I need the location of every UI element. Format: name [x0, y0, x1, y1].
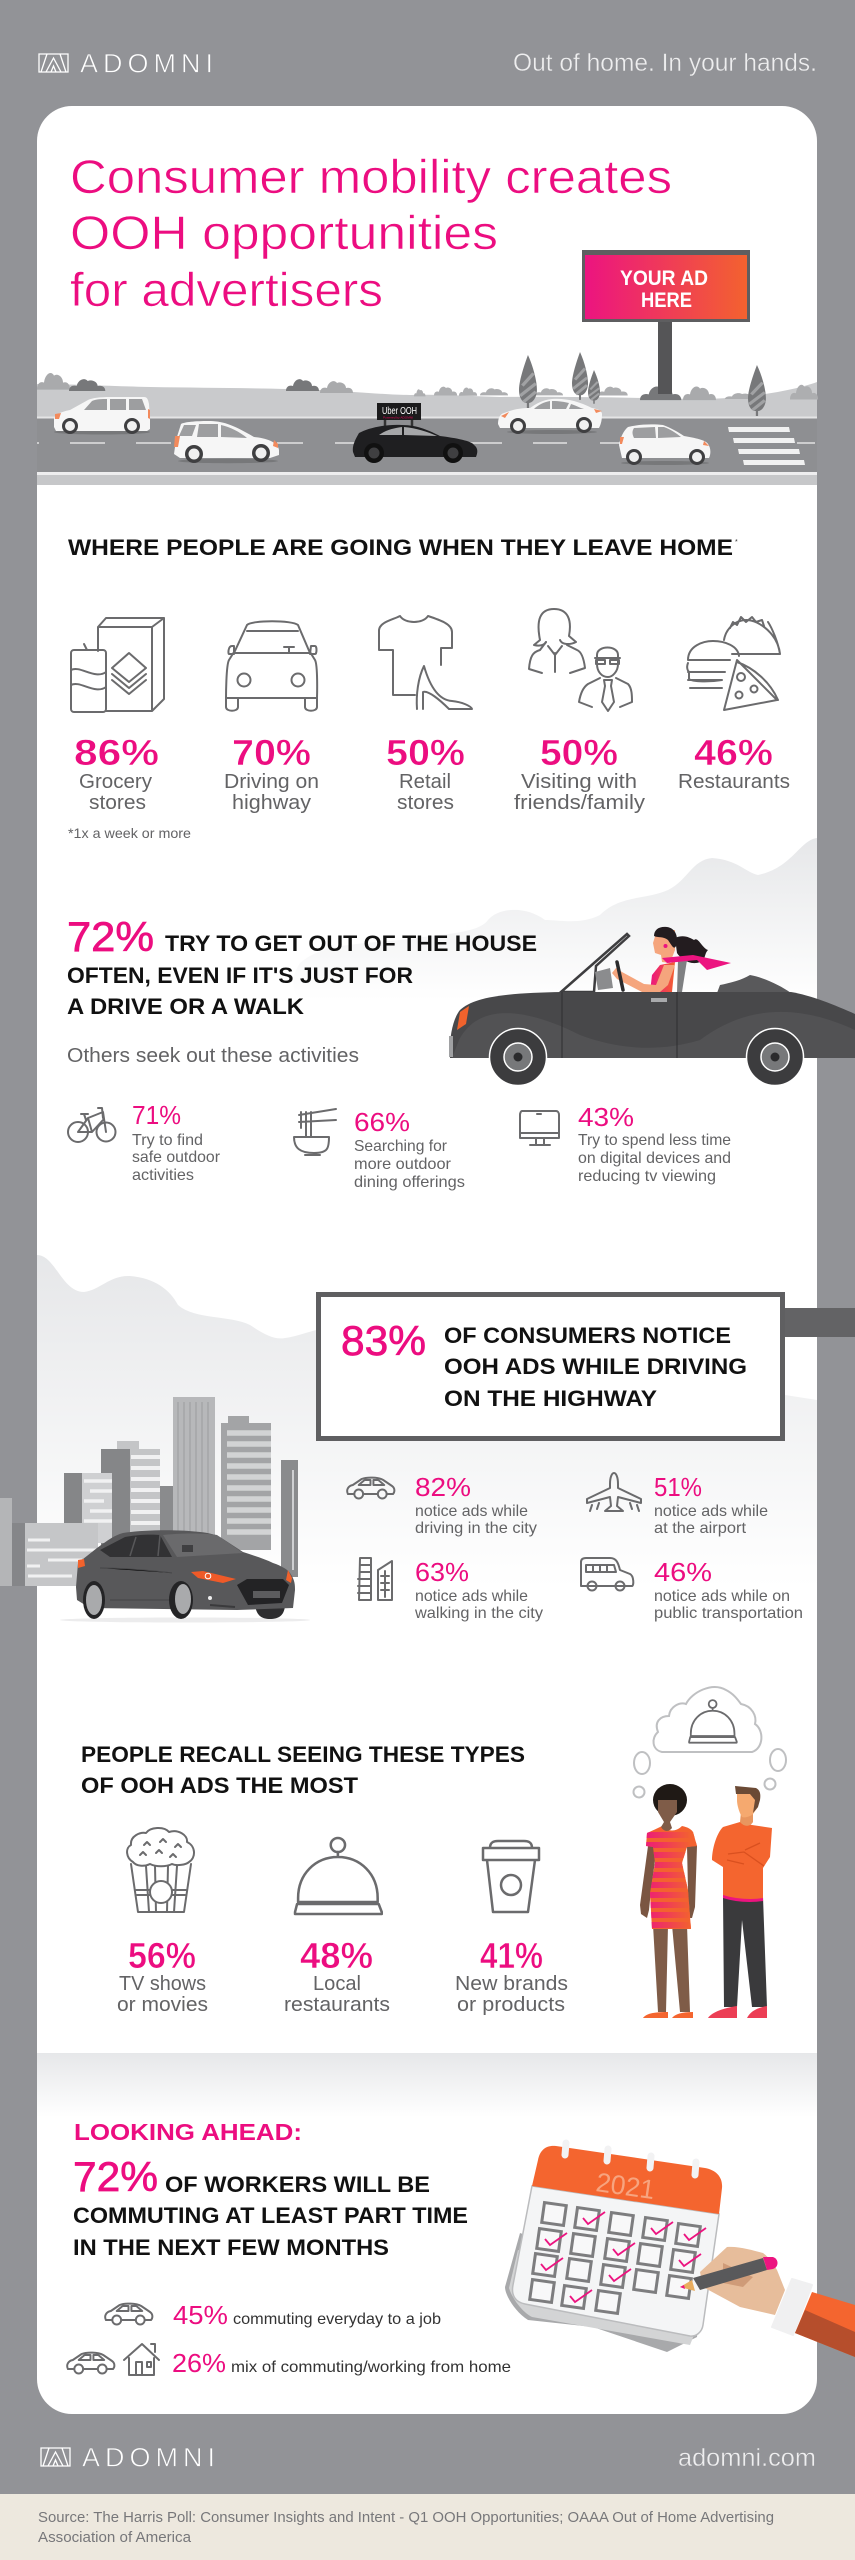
- illustration: calendar and hand: 2021: [594, 2167, 657, 2205]
- pencil: [680, 2257, 778, 2291]
- wheels: [83, 1581, 105, 1619]
- front low tower: [64, 1473, 112, 1543]
- heading: 72 percent get out: 72%: [67, 913, 154, 960]
- billboard callout: 83 percent: [318, 1294, 855, 1438]
- icon: shirt and heel: [379, 616, 472, 709]
- stat: airport: at the airport: [654, 1520, 747, 1537]
- section heading: recall: [81, 1742, 525, 1798]
- heading: 72 percent get out: TRY TO GET OUT OF THE HOUSE: [165, 931, 537, 956]
- heading: 72 percent of workers: OF WORKERS WILL BE: [165, 2172, 430, 2197]
- icon: burger taco pizza: [687, 617, 780, 710]
- car body: [450, 992, 855, 1058]
- icon: coffee cup: [483, 1841, 539, 1912]
- stat: TV shows or movies: [117, 1935, 208, 2016]
- check marks: [541, 2212, 706, 2302]
- footer logo: ADOMNI: [82, 2442, 215, 2472]
- illustration: grey sedan: [60, 1530, 310, 1622]
- looking ahead panel: [37, 2053, 817, 2117]
- crosswalk: [728, 427, 805, 465]
- folded roof: [717, 975, 791, 993]
- stat: TV shows or movies: 56%: [128, 1935, 196, 1976]
- activity: dining: 66%: [354, 1107, 410, 1137]
- stat: new brands or products: or products: [457, 1994, 565, 2016]
- activity: outdoor: [68, 1100, 221, 1184]
- activity: outdoor: activities: [132, 1167, 194, 1184]
- icon: bicycle: [68, 1108, 116, 1142]
- black car with Uber OOH topper: Powered by ADOMNI: [383, 416, 413, 420]
- stat: public transportation: 46%: [654, 1557, 712, 1587]
- grille: [237, 1579, 289, 1605]
- stat: driving in city: [347, 1472, 537, 1537]
- white sedan: [498, 399, 602, 434]
- head: [653, 1784, 687, 1816]
- dress: [646, 1826, 697, 1929]
- stat: driving in city: notice ads while: [415, 1503, 528, 1520]
- heading: 72 percent of workers: 72%: [73, 2153, 158, 2200]
- hair: [654, 927, 677, 948]
- icon: airplane: [587, 1473, 641, 1511]
- mid tower: [101, 1441, 160, 1545]
- activity: less screen time: on digital devices and: [578, 1150, 731, 1167]
- arm: [612, 965, 675, 992]
- binder rings: [565, 2143, 696, 2175]
- icon: popcorn: [127, 1828, 194, 1912]
- bushes and shrubs: [37, 373, 818, 400]
- stat: grocery stores: [74, 732, 159, 814]
- heading: 72 percent get out: [67, 913, 537, 1019]
- back pages: [505, 2233, 700, 2352]
- stat: grocery stores: stores: [89, 792, 146, 814]
- lane markings: [37, 442, 815, 444]
- stat: walking in city: [358, 1557, 543, 1622]
- stat: airport: notice ads while: [654, 1503, 768, 1520]
- seat: [677, 960, 687, 992]
- white hatchback: [174, 421, 279, 463]
- tall striped tower: [173, 1397, 215, 1542]
- low building: [25, 1523, 98, 1586]
- illustration: woman driving convertible: [449, 927, 855, 1086]
- stat: local restaurants: [284, 1935, 390, 2016]
- icon: car: [347, 1478, 394, 1498]
- activity: less screen time: Try to spend less time: [578, 1132, 731, 1149]
- icon: car: [105, 2304, 152, 2324]
- billboard: YOUR AD: [620, 267, 708, 290]
- headlight: [191, 1571, 236, 1583]
- thought cloud with cloche: [634, 1687, 786, 1798]
- building out of panel: [0, 1498, 12, 1586]
- billboard callout: 83 percent: 83%: [341, 1317, 426, 1364]
- shoes: [708, 2006, 767, 2018]
- stat: walking in city: 63%: [415, 1557, 469, 1587]
- heading: 72 percent of workers: [73, 2153, 468, 2260]
- body: [76, 1530, 295, 1610]
- billboard: HERE: [641, 289, 692, 312]
- heading: 72 percent of workers: COMMUTING AT LEAST PART TIME: [73, 2203, 468, 2228]
- footer website: adomni.com: [678, 2444, 816, 2472]
- stat: walking in city: walking in the city: [414, 1605, 543, 1622]
- icon: car and house: [67, 2344, 159, 2375]
- title: for advertisers: [70, 263, 383, 316]
- activity: dining: Searching for: [354, 1138, 448, 1155]
- subheading: Others seek out these activities: [67, 1045, 359, 1067]
- wheels: [490, 1028, 804, 1086]
- source band: Source: The Harris Poll: Consumer Insights and Intent - Q1 OOH Opportunities; OAAA Out of Home Advertising: [38, 2509, 774, 2526]
- stat: mixed commuting: mix of commuting/working from home: [231, 2359, 511, 2376]
- stat: mixed commuting: 26%: [172, 2348, 226, 2378]
- stat: airport: [587, 1472, 768, 1537]
- icon: buildings: [358, 1558, 392, 1600]
- side windows: [100, 1535, 172, 1557]
- stat: TV shows or movies: TV shows: [119, 1973, 206, 1995]
- stat: visiting friends and family: 50%: [540, 732, 618, 773]
- torso: [650, 962, 675, 992]
- white van: [54, 397, 150, 434]
- stat: commuting everyday: [105, 2300, 441, 2330]
- section heading: where people go: WHERE PEOPLE ARE GOING WHEN THEY LEAVE HOME: [68, 535, 733, 560]
- stat: retail stores: Retail: [399, 771, 451, 793]
- section heading: recall: OF OOH ADS THE MOST: [81, 1773, 358, 1798]
- stat: visiting friends and family: friends/family: [514, 792, 645, 814]
- stat: retail stores: [386, 732, 465, 814]
- heading: 72 percent get out: A DRIVE OR A WALK: [67, 994, 305, 1019]
- scarf: [662, 955, 731, 970]
- activity: outdoor: 71%: [132, 1100, 181, 1130]
- background cloud behind convertible: [293, 838, 817, 1000]
- stat: driving on highway: highway: [232, 792, 311, 814]
- face and neck: [653, 930, 675, 963]
- stat: new brands or products: New brands: [455, 1973, 568, 1995]
- black car with Uber OOH topper: [353, 403, 477, 463]
- right tower: [221, 1416, 271, 1550]
- stat: walking in city: notice ads while: [415, 1588, 528, 1605]
- hero road scene: [37, 250, 818, 485]
- trees: [519, 352, 766, 416]
- heading: 72 percent get out: OFTEN, EVEN IF IT'S JUST FOR: [67, 963, 413, 988]
- icon: two people: [529, 609, 632, 711]
- hand: [700, 2247, 785, 2315]
- billboard callout: 83 percent: OOH ADS WHILE DRIVING: [444, 1354, 747, 1379]
- activity: dining: more outdoor: [354, 1156, 452, 1173]
- stat: TV shows or movies: or movies: [117, 1994, 208, 2016]
- windscreen: [163, 1534, 243, 1557]
- stat: visiting friends and family: Visiting with: [521, 771, 637, 793]
- sleeve: [795, 2292, 855, 2357]
- title: [70, 150, 672, 316]
- illustration: calendar and hand: [505, 2143, 855, 2357]
- stat: driving on highway: [224, 732, 319, 814]
- icon: restaurant cloche: [295, 1838, 382, 1914]
- stat: driving on highway: Driving on: [224, 771, 319, 793]
- icon: bus: [581, 1558, 633, 1590]
- activity: less screen time: 43%: [578, 1102, 634, 1132]
- illustration: city skyline: [0, 1397, 298, 1586]
- steering wheel: [617, 962, 623, 990]
- header tagline: Out of home. In your hands.: [513, 49, 817, 77]
- windshield frame: [561, 934, 629, 992]
- road: [37, 418, 817, 472]
- trousers: [723, 1897, 767, 2007]
- stat: new brands or products: 41%: [480, 1935, 543, 1976]
- stat: mixed commuting: [67, 2344, 511, 2378]
- heading: looking ahead: LOOKING AHEAD:: [74, 2119, 302, 2145]
- stat: restaurants: [678, 732, 790, 793]
- face: [737, 1792, 758, 1817]
- section heading: where people go: *: [735, 539, 738, 546]
- footnote: *1x a week or more: [68, 825, 191, 841]
- stat: grocery stores: 86%: [74, 732, 159, 773]
- arms: [640, 1846, 697, 1918]
- hills: [37, 382, 817, 420]
- white compact: [619, 424, 710, 465]
- activity: less screen time: reducing tv viewing: [578, 1168, 716, 1185]
- title: OOH opportunities: [70, 206, 498, 259]
- icon: grocery: [71, 618, 164, 712]
- stat: driving in city: 82%: [415, 1472, 471, 1502]
- activity: less screen time: [520, 1102, 731, 1185]
- stat: driving on highway: 70%: [232, 732, 311, 773]
- illustration: woman: [640, 1784, 700, 2018]
- stat: grocery stores: Grocery: [79, 771, 152, 793]
- activity: dining: dining offerings: [354, 1174, 465, 1191]
- icon: monitor: [520, 1111, 559, 1145]
- background cloud behind city: [37, 1255, 817, 1587]
- stat: public transportation: notice ads while on: [654, 1588, 790, 1605]
- stat: retail stores: 50%: [386, 732, 465, 773]
- calendar page: [512, 2186, 719, 2336]
- source band: Association of America: [38, 2529, 192, 2546]
- billboard callout: 83 percent: OF CONSUMERS NOTICE: [444, 1323, 731, 1348]
- stat: commuting everyday: 45%: [173, 2300, 228, 2330]
- stat: local restaurants: restaurants: [284, 1994, 390, 2016]
- billboard callout: 83 percent: ON THE HIGHWAY: [444, 1386, 657, 1411]
- body crease: [100, 1568, 172, 1600]
- tail and side lamp: [78, 1559, 85, 1568]
- heading: 72 percent of workers: IN THE NEXT FEW MONTHS: [73, 2235, 389, 2260]
- stat: commuting everyday: commuting everyday to a job: [233, 2311, 441, 2328]
- stat: public transportation: [581, 1557, 803, 1622]
- source band: [0, 2494, 855, 2560]
- stat: local restaurants: 48%: [300, 1935, 373, 1976]
- stat: visiting friends and family: [514, 732, 645, 814]
- date boxes: [530, 2203, 700, 2313]
- icon: noodle bowl: [294, 1109, 336, 1155]
- section heading: recall: PEOPLE RECALL SEEING THESE TYPES: [81, 1742, 525, 1767]
- black car with Uber OOH topper: Uber OOH: [382, 406, 417, 417]
- stat: driving in city: driving in the city: [415, 1520, 537, 1537]
- stat: restaurants: 46%: [694, 732, 773, 773]
- cuff: [772, 2279, 812, 2335]
- sweater: [712, 1822, 772, 1901]
- header logo: ADOMNI: [80, 48, 213, 78]
- neck and collar: [740, 1812, 753, 1826]
- title: Consumer mobility creates: [70, 150, 672, 203]
- illustration: man: [708, 1786, 772, 2018]
- shoes: [643, 2012, 693, 2018]
- hair: [735, 1786, 760, 1813]
- slim tower: [281, 1460, 298, 1577]
- activity: dining: [294, 1107, 465, 1191]
- legs: [653, 1925, 690, 2012]
- ponytail: [675, 936, 708, 963]
- activity: outdoor: safe outdoor: [132, 1149, 221, 1166]
- billboard: [582, 250, 750, 394]
- activity: outdoor: Try to find: [132, 1132, 203, 1149]
- orange header: [532, 2146, 722, 2214]
- stat: new brands or products: [455, 1935, 568, 2016]
- stat: airport: 51%: [654, 1472, 702, 1502]
- stat: restaurants: Restaurants: [678, 771, 790, 793]
- stat: local restaurants: Local: [313, 1973, 361, 1995]
- stat: public transportation: public transportation: [654, 1605, 803, 1622]
- far wheel: [255, 1606, 285, 1619]
- icon: car front: [226, 621, 317, 711]
- stat: retail stores: stores: [397, 792, 454, 814]
